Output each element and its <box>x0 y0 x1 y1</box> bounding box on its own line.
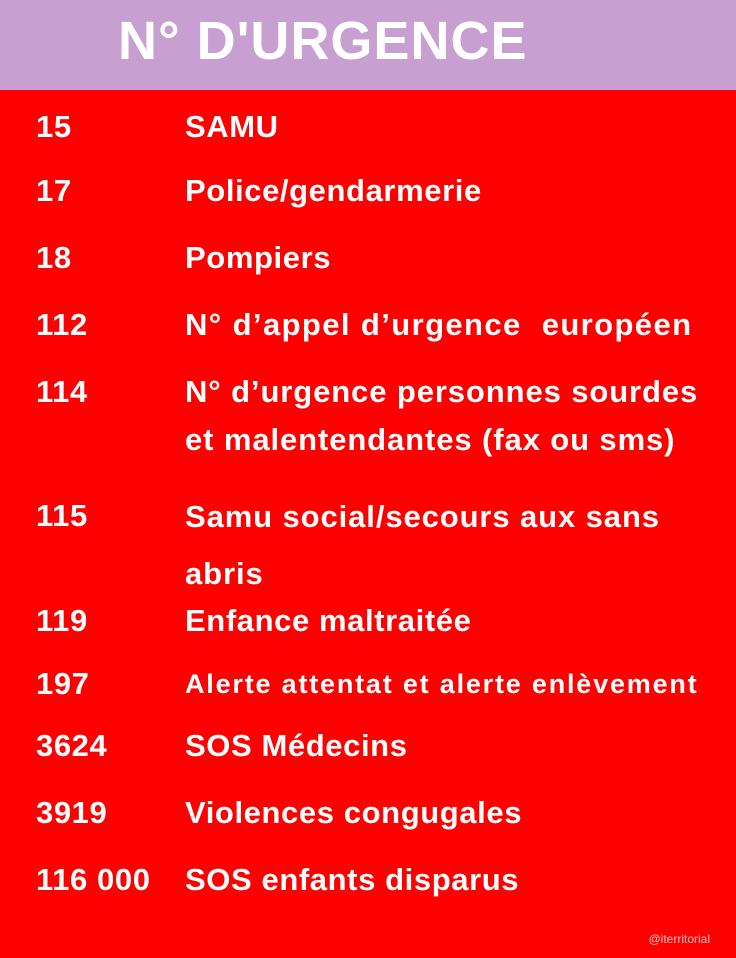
row 197: 197 <box>36 666 90 701</box>
row 116 000 <box>36 862 519 897</box>
row 3624 <box>36 728 408 763</box>
row 114 <box>36 374 698 457</box>
row 17: 17 <box>36 173 72 208</box>
row 115 <box>36 498 660 591</box>
row 115: Samu social/secours aux sans <box>185 499 660 534</box>
row 119: Enfance maltraitée <box>185 603 471 638</box>
row 119: 119 <box>36 603 88 638</box>
row 116 000: SOS enfants disparus <box>185 862 519 897</box>
row 17: Police/gendarmerie <box>185 173 482 208</box>
row 3919 <box>36 795 522 830</box>
row 18 <box>36 240 331 275</box>
row 15 <box>36 109 279 144</box>
row 115: 115 <box>36 498 88 533</box>
row 18: 18 <box>36 240 72 275</box>
row 197 <box>36 666 698 701</box>
row 15: 15 <box>36 109 72 144</box>
row 197: Alerte attentat et alerte enlèvement <box>185 669 698 699</box>
row 3919: 3919 <box>36 795 107 830</box>
row 17 <box>36 173 482 208</box>
header band <box>0 0 736 90</box>
row 119 <box>36 603 471 638</box>
row 114: N° d’urgence personnes sourdes <box>185 374 698 409</box>
watermark: @iterritorial <box>648 932 710 946</box>
row 114: et malentendantes (fax ou sms) <box>185 422 675 457</box>
row 18: Pompiers <box>185 240 331 275</box>
row 114: 114 <box>36 374 88 409</box>
row 112: 112 <box>36 307 88 342</box>
row 116 000: 116 000 <box>36 862 151 897</box>
row 3919: Violences congugales <box>185 795 522 830</box>
row 3624: SOS Médecins <box>185 728 408 763</box>
row 3624: 3624 <box>36 728 107 763</box>
row 15: SAMU <box>185 109 279 144</box>
row 115: abris <box>185 556 264 591</box>
title: N° D'URGENCE <box>118 11 527 71</box>
row 112: N° d’appel d’urgence européen <box>185 307 692 342</box>
